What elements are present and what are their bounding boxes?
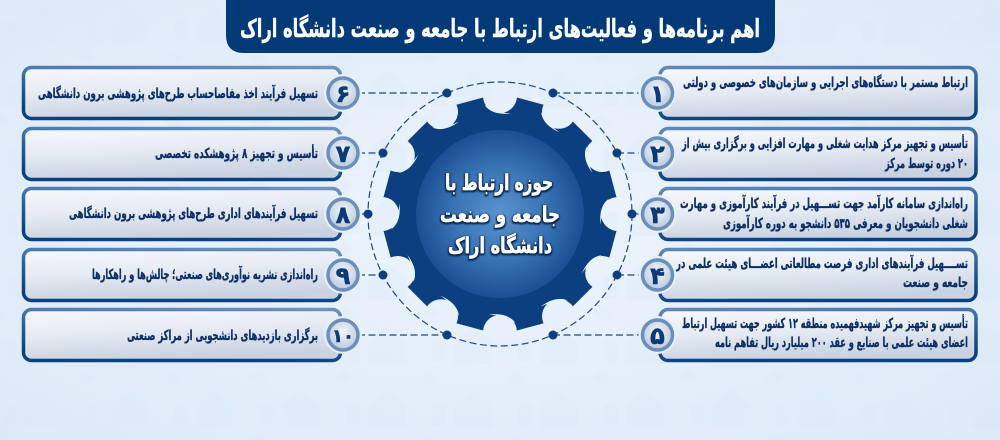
central gear — [384, 98, 616, 330]
card 7: ۷ — [336, 140, 351, 168]
gear caption: دانشگاه اراک — [448, 232, 552, 259]
card 5: ۵ — [650, 322, 665, 350]
card 4 — [638, 250, 976, 300]
card 7: تأسیس و تجهیز ۸ پژوهشکده تخصصی — [155, 144, 318, 162]
card 8: تسهیل فرآیندهای اداری طرح‌های پژوهشی برون دانشگاهی — [69, 204, 318, 222]
connector dots — [364, 88, 636, 340]
card 3 — [638, 188, 976, 240]
card 10: برگزاری بازدیدهای دانشجویی از مراکز صنعتی — [127, 327, 318, 344]
card 10: ۱۰ — [332, 326, 354, 347]
gear caption — [440, 171, 560, 259]
card 4: ۴ — [650, 262, 665, 290]
card 6 — [24, 68, 362, 118]
title banner — [226, 0, 775, 53]
card 5 — [638, 310, 976, 360]
dashed ring with connector lines — [358, 82, 642, 346]
card 9 — [24, 250, 362, 300]
card 2 — [638, 128, 976, 180]
gear caption: حوزه ارتباط با — [445, 171, 553, 196]
card 1: ۱ — [650, 80, 665, 108]
card 2: ۲ — [650, 140, 665, 168]
card 7 — [24, 128, 362, 180]
gear caption: جامعه و صنعت — [440, 203, 560, 228]
card 8: ۸ — [336, 201, 351, 229]
card 6: تسهیل فرآیند اخذ مفاصاحساب طرح‌های پژوهشی برون دانشگاهی — [38, 84, 318, 102]
card 1 — [638, 68, 976, 118]
card 10 — [24, 310, 362, 360]
card 9: ۹ — [336, 262, 351, 290]
card 9: راه‌اندازی نشریه نوآوری‌های صنعتی؛ چالش‌ها و راهکارها — [92, 265, 318, 283]
card 3: ۳ — [650, 201, 665, 229]
card 8 — [24, 188, 362, 240]
card 6: ۶ — [336, 80, 350, 108]
